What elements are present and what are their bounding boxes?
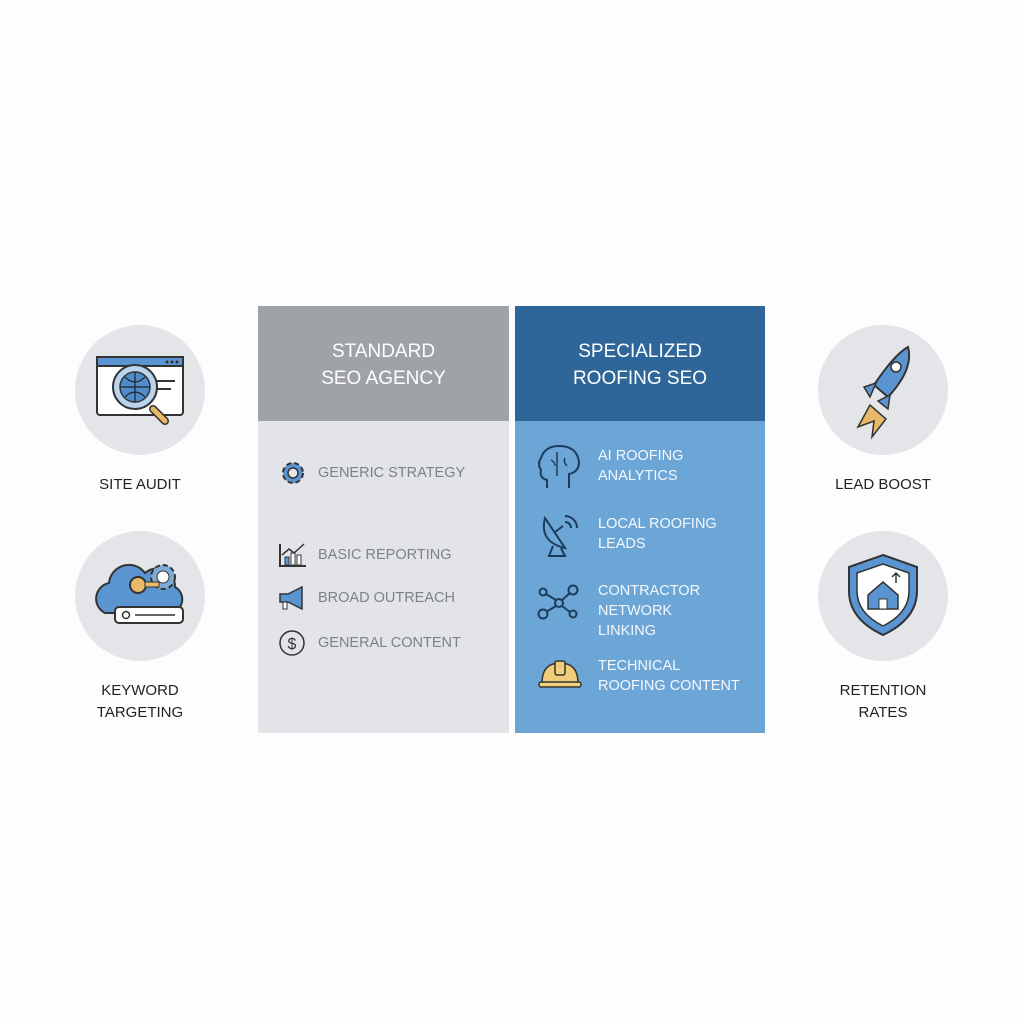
- label: site audit: SITE AUDIT: [99, 476, 181, 493]
- item: contractor network linking: NETWORK: [598, 603, 672, 619]
- item: generic strategy: [282, 462, 465, 484]
- icon: retention shield: [818, 531, 948, 661]
- item: general content: $: [288, 636, 297, 653]
- heading: specialized: SPECIALIZED: [578, 341, 702, 362]
- item: contractor network linking: [598, 583, 700, 639]
- label: retention rates: RETENTION: [840, 682, 926, 699]
- panel: standard seo agency: [258, 306, 509, 733]
- item: technical roofing content: [598, 658, 740, 694]
- item: contractor network linking: CONTRACTOR: [598, 583, 700, 599]
- heading: specialized: [515, 306, 765, 421]
- item: local roofing leads: LEADS: [598, 536, 646, 552]
- heading: standard: SEO AGENCY: [321, 368, 446, 389]
- heading: specialized: ROOFING SEO: [573, 368, 707, 389]
- item: ai roofing analytics: [598, 448, 683, 484]
- item: broad outreach: BROAD OUTREACH: [318, 590, 455, 606]
- item: general content: GENERAL CONTENT: [318, 635, 461, 651]
- panel: specialized roofing seo: [515, 306, 765, 733]
- label: retention rates: RATES: [859, 704, 907, 721]
- item: local roofing leads: [598, 516, 717, 552]
- item: basic reporting: BASIC REPORTING: [318, 547, 451, 563]
- label: retention rates: [840, 682, 926, 721]
- item: ai roofing analytics: AI ROOFING: [598, 448, 683, 464]
- item: general content: [279, 630, 461, 656]
- label: keyword targeting: [97, 682, 183, 721]
- item: broad outreach: [279, 586, 455, 610]
- item: ai roofing analytics: ANALYTICS: [598, 468, 678, 484]
- heading: standard: [258, 306, 509, 421]
- item: local roofing leads: LOCAL ROOFING: [598, 516, 717, 532]
- label: keyword targeting: KEYWORD: [101, 682, 179, 699]
- icon: satellite: [542, 515, 578, 557]
- item: contractor network linking: LINKING: [598, 623, 656, 639]
- icon: network: [538, 584, 578, 620]
- heading: standard: STANDARD: [332, 341, 435, 362]
- item: basic reporting: [279, 544, 451, 567]
- item: generic strategy: GENERIC STRATEGY: [318, 465, 465, 481]
- label: keyword targeting: TARGETING: [97, 704, 183, 721]
- icon: site audit: [75, 325, 205, 455]
- item: technical roofing content: ROOFING CONTENT: [598, 678, 740, 694]
- label: lead boost: LEAD BOOST: [835, 476, 931, 493]
- icon: hard hat: [538, 660, 582, 688]
- item: technical roofing content: TECHNICAL: [598, 658, 680, 674]
- icon: brain: [538, 445, 580, 488]
- icon: lead boost rocket: [818, 325, 948, 455]
- icon: keyword targeting: [75, 531, 205, 661]
